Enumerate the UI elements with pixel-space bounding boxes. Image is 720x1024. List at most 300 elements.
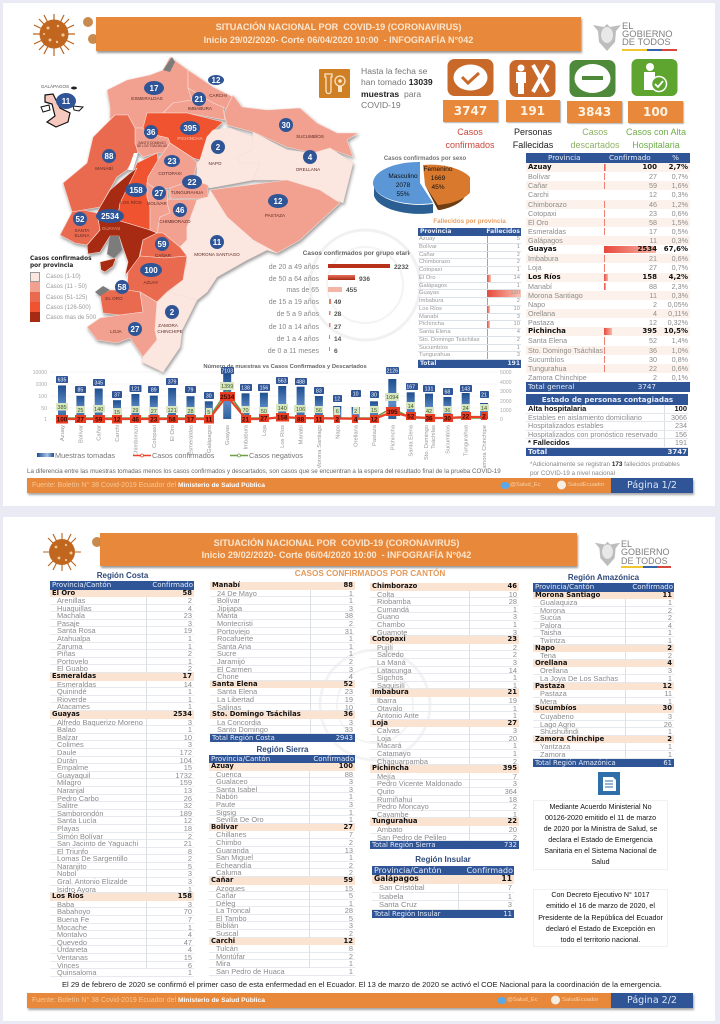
stat: casos descartados: 3843 bbox=[578, 105, 611, 119]
table: región amazónica: 1 bbox=[668, 636, 672, 645]
table: región sierra: Cuenca bbox=[216, 770, 241, 779]
table: región sierra continued: Loja bbox=[377, 734, 391, 743]
table: confirmed by province: 100 bbox=[642, 163, 657, 171]
table: state of infected people: 100 bbox=[674, 404, 687, 413]
table: región costa: Buena Fe bbox=[57, 915, 89, 924]
table: región costa: 6 bbox=[188, 961, 192, 970]
map labels and case count bubbles: LOS RÍOS bbox=[120, 199, 142, 205]
chart: samples vs confirmed and discarded cases bbox=[33, 364, 512, 468]
table: región sierra continued: La Maná bbox=[377, 658, 406, 667]
table: región insular: Total Región Insular bbox=[374, 910, 440, 918]
negative value labels: 25 bbox=[77, 408, 83, 414]
sample value labels: 379 bbox=[168, 380, 177, 386]
table: confirmed by province: 2 bbox=[653, 300, 657, 309]
table: confirmed by province: Sto. Domingo Tsáchilas bbox=[528, 346, 603, 354]
confirmed value labels: 88 bbox=[297, 416, 305, 424]
table: región costa: Pasaje bbox=[57, 619, 80, 628]
table: región sierra: Cañar bbox=[216, 891, 236, 900]
table: región costa: Confirmado bbox=[152, 581, 193, 589]
map labels and case count bubbles: SUCUMBÍOS bbox=[296, 133, 324, 139]
table: región amazónica: Tena bbox=[540, 651, 556, 660]
province axis labels: Loja bbox=[262, 424, 268, 436]
table: deaths by province: Bolívar bbox=[419, 244, 437, 250]
table: región sierra continued: Guano bbox=[377, 612, 399, 621]
table: confirmed by province: 1,0% bbox=[672, 346, 688, 354]
table: región amazónica: 30 bbox=[663, 704, 672, 712]
table: confirmed by province: Loja bbox=[528, 263, 542, 272]
heading: región amazónica: Región Amazónica bbox=[568, 573, 639, 582]
table: región costa: Quevedo bbox=[57, 938, 87, 947]
note: difference between samples and results: La diferencia entre las muestras tomadas menos los casos confirmados y descartados, son casos que se encuentran a la espera del resultado final de la prueba COVID-19 bbox=[27, 468, 501, 475]
table: región costa: Mocache bbox=[57, 923, 87, 932]
table: confirmed by province: Los Ríos bbox=[528, 272, 561, 280]
table: región costa: 2534 bbox=[173, 710, 192, 718]
table: región amazónica: 1 bbox=[668, 742, 672, 751]
table: región costa: 17 bbox=[183, 672, 192, 680]
table: región sierra: Suscal bbox=[216, 929, 238, 938]
bar chart: confirmed by age group: mas de 65 bbox=[286, 287, 319, 294]
table: confirmed by province: 2,3% bbox=[672, 282, 688, 291]
table: región costa: 172 bbox=[180, 748, 192, 757]
table: región sierra continued: Salcedo bbox=[377, 650, 404, 659]
table: confirmed by province: 0,05% bbox=[668, 300, 688, 309]
table: región costa continued: 23 bbox=[345, 687, 353, 696]
table: región amazónica: 1 bbox=[668, 628, 672, 637]
table: región sierra continued: Riobamba bbox=[377, 597, 411, 606]
bar chart: confirmed by age group: 27 bbox=[334, 324, 342, 331]
table: deaths by province: Cañar bbox=[419, 252, 435, 258]
table: región costa: Salitre bbox=[57, 801, 78, 810]
table: deaths by province: 3 bbox=[517, 352, 520, 358]
stat: alta hospitalaria: Casos con Alta bbox=[626, 127, 686, 137]
map labels and case count bubbles: TUNGURAHUA bbox=[171, 190, 204, 195]
confirmed value labels: 30 bbox=[444, 416, 451, 422]
pie chart: cases by sex: 55% bbox=[396, 191, 410, 198]
table: región costa: 1 bbox=[188, 968, 192, 977]
table: región costa: 1 bbox=[188, 695, 192, 704]
table: región costa: Provincia/Cantón bbox=[52, 581, 111, 589]
table: confirmed by province: 36 bbox=[649, 346, 657, 354]
table: región costa continued: Sto. Domingo Tsáchilas bbox=[212, 710, 301, 718]
logo: El Gobierno de Todos page 2 bbox=[595, 539, 671, 568]
province axis labels: Sucumbíos bbox=[445, 425, 451, 454]
negative value labels: 36 bbox=[444, 408, 450, 414]
table: confirmed by province: 11 bbox=[650, 236, 657, 245]
sample value labels: 488 bbox=[296, 380, 305, 386]
table: región sierra continued: 1 bbox=[513, 620, 517, 629]
table: región sierra continued: 395 bbox=[503, 764, 517, 772]
negative value labels: 140 bbox=[94, 407, 103, 413]
table: región costa continued: Chone bbox=[217, 672, 239, 681]
table: confirmed by province: 11 bbox=[650, 291, 657, 300]
heading: región insular: Región Insular bbox=[415, 855, 471, 864]
table: región sierra continued: Otavalo bbox=[377, 704, 402, 712]
sample value labels: 37 bbox=[114, 392, 120, 398]
footer: page number 2: Página 2/2 bbox=[627, 995, 677, 1006]
map labels and case count bubbles: 12 bbox=[212, 76, 221, 85]
text: samples taken: han tomado 13039 bbox=[361, 77, 433, 87]
stat: alta hospitalaria bbox=[626, 59, 686, 150]
table: región amazónica: 3 bbox=[668, 712, 672, 721]
table: región amazónica: Morona Santiago bbox=[535, 590, 600, 598]
footer: page 1 source: Fuente: Boletín N° 38 Covid-2019 Ecuador del Ministerio de Salud Pública bbox=[32, 482, 265, 489]
table: región costa continued: Salinas bbox=[217, 702, 241, 712]
table: región insular: Provincia/Cantón bbox=[374, 866, 442, 875]
sample bars bbox=[58, 374, 488, 419]
text: executive decree: Presidente de la República del Ecuador bbox=[538, 914, 663, 922]
sample value labels: 121 bbox=[131, 386, 140, 392]
table: state of infected people: Hospitalizados con pronóstico reservado bbox=[528, 430, 657, 439]
negative value labels: 29 bbox=[132, 408, 138, 414]
bar chart: confirmed by age group: 6 bbox=[334, 348, 338, 355]
table: región costa continued: 88 bbox=[344, 581, 353, 589]
watermark: page 1 coat of arms bbox=[308, 228, 422, 342]
table: región amazónica: 26 bbox=[664, 720, 672, 729]
table: confirmed by province: 1,4% bbox=[672, 336, 688, 345]
left axis bbox=[33, 370, 47, 423]
negative value labels: 140 bbox=[278, 406, 287, 412]
table: región sierra continued: 3 bbox=[513, 658, 517, 667]
map: Galápagos islands bbox=[41, 83, 83, 127]
map labels and case count bubbles: 21 bbox=[195, 95, 204, 104]
table: región costa: 1 bbox=[188, 634, 192, 643]
right axis: 5000 bbox=[500, 370, 512, 376]
map labels and case count bubbles: 59 bbox=[158, 240, 167, 249]
table: región costa: 3 bbox=[188, 869, 192, 878]
table: región costa: San Jacinto de Yaguachi bbox=[57, 839, 138, 848]
table: región costa: Portovelo bbox=[57, 657, 88, 666]
table: state of infected people: Alta hospitalaria bbox=[528, 404, 586, 413]
table: confirmed by province: 2 bbox=[653, 373, 657, 382]
icon: legal document bbox=[598, 772, 620, 795]
province axis labels: Los Ríos bbox=[280, 425, 286, 448]
table: región sierra: 15 bbox=[345, 884, 353, 892]
table: confirmed by province: Carchi bbox=[528, 190, 549, 199]
table: región sierra continued: 2 bbox=[513, 833, 517, 842]
table: región costa: 4 bbox=[188, 945, 192, 954]
negative value labels: 42 bbox=[426, 409, 432, 415]
table: deaths by province: Azuay bbox=[419, 236, 435, 242]
table: región costa: 58 bbox=[183, 588, 192, 596]
map labels and case count bubbles: 4 bbox=[308, 153, 313, 162]
table: región sierra continued: Chambo bbox=[377, 620, 405, 629]
text: samples taken bbox=[361, 66, 433, 110]
table: deaths by province: Sto. Domingo Tsáchilas bbox=[419, 337, 479, 343]
bar chart: confirmed by age group: de 5 a 9 años bbox=[277, 311, 319, 318]
table: región costa continued: Jaramijó bbox=[217, 657, 245, 666]
table: región costa: 159 bbox=[180, 778, 192, 787]
province axis labels: Esmeraldas bbox=[188, 425, 194, 456]
table: región sierra continued: 3 bbox=[513, 628, 517, 637]
table: región costa continued: 1 bbox=[349, 596, 353, 605]
map labels and case count bubbles: 2 bbox=[216, 143, 221, 152]
table: región costa: Vinces bbox=[57, 961, 79, 970]
table: state of infected people: Total bbox=[528, 448, 547, 456]
table: región sierra: Biblián bbox=[216, 921, 238, 930]
table: región sierra continued: 20 bbox=[509, 825, 517, 834]
table: región costa bbox=[50, 581, 194, 977]
table: deaths by province: 10 bbox=[514, 321, 520, 327]
negative value labels: 14 bbox=[481, 406, 487, 412]
negative value labels: 2 bbox=[354, 409, 357, 415]
table: región sierra continued: 732 bbox=[504, 841, 517, 849]
table: región amazónica: 1 bbox=[668, 674, 672, 683]
table: confirmed by province: Pastaza bbox=[528, 318, 554, 327]
table: región costa continued: La Concordia bbox=[217, 718, 261, 727]
table: confirmed by province: Tungurahua bbox=[528, 364, 566, 373]
table: confirmed by province: Cañar bbox=[528, 181, 548, 190]
negative value labels: 15 bbox=[371, 408, 377, 414]
table: región costa continued: La Libertad bbox=[217, 695, 254, 704]
table: deaths by province: Sucumbíos bbox=[419, 344, 448, 350]
table: deaths by province: 2 bbox=[517, 259, 520, 265]
table: deaths by province: 5 bbox=[517, 236, 520, 242]
table: región sierra: 3 bbox=[349, 785, 353, 794]
table: región costa: Quinsaloma bbox=[57, 968, 96, 977]
table: región sierra: Nabón bbox=[216, 792, 238, 801]
table: deaths by province: Chimborazo bbox=[419, 259, 450, 265]
table: región costa: 104 bbox=[180, 756, 192, 765]
table: región sierra continued: 1 bbox=[513, 741, 517, 750]
map: Ecuador provinces with confirmed cases bbox=[40, 56, 360, 376]
table: región costa: Arenillas bbox=[57, 596, 85, 605]
table: región costa: 2 bbox=[188, 832, 192, 840]
table: confirmed by province: Bolívar bbox=[528, 172, 550, 181]
map labels and case count bubbles: GUAYAS bbox=[102, 226, 120, 231]
negative value labels: 24 bbox=[463, 406, 469, 412]
confirmed value labels: 27 bbox=[77, 416, 84, 424]
table: confirmed by province: 0,3% bbox=[672, 190, 688, 199]
table: región sierra continued: 14 bbox=[509, 666, 517, 675]
table: deaths by province: 130 bbox=[510, 290, 520, 296]
table: confirmed by province: Manabí bbox=[528, 282, 552, 291]
stat: casos descartados bbox=[567, 60, 624, 150]
province axis labels: Guayas bbox=[225, 425, 231, 445]
table: región costa: Pedro Carbo bbox=[57, 794, 99, 803]
map labels and case count bubbles: DE LOS TSÁCHILAS bbox=[137, 144, 167, 148]
table: región costa: 14 bbox=[184, 680, 192, 689]
bar chart: confirmed by age group: de 50 a 64 años bbox=[269, 276, 319, 283]
table: state of infected people: 156 bbox=[675, 430, 687, 439]
confirmed value labels: 27 bbox=[260, 416, 268, 422]
logo: El Gobierno de Todos page 2: DE TODOS bbox=[621, 556, 668, 566]
table: confirmed by province: 0,8% bbox=[672, 355, 688, 364]
table: deaths by province: 2 bbox=[517, 337, 520, 343]
table: región costa: Guayas bbox=[52, 710, 80, 718]
table: región costa: 1 bbox=[188, 725, 192, 734]
table: región sierra: 27 bbox=[344, 823, 353, 831]
text: ministerial agreement: de 2020 por la Ministra de Salud, se bbox=[544, 825, 657, 833]
table: región costa continued: Bolívar bbox=[217, 596, 240, 605]
stat: personas fallecidas: 191 bbox=[520, 104, 545, 118]
legend: cases by province: Casos mas de 500 bbox=[46, 315, 96, 321]
table: región sierra continued: Pujilí bbox=[377, 643, 393, 652]
negative value labels: 5 bbox=[207, 410, 210, 416]
sample value labels: 68 bbox=[445, 390, 450, 396]
province axis labels: Carchi bbox=[115, 425, 121, 442]
table: región costa: Balzar bbox=[57, 733, 78, 742]
table: región insular: Confirmado bbox=[467, 866, 513, 875]
table: región costa continued: 1 bbox=[349, 642, 353, 651]
table: región sierra: Guaranda bbox=[216, 846, 249, 855]
table: confirmed by province: 1,2% bbox=[672, 200, 688, 208]
text: ministerial agreement: declara el Estado de Emergencia bbox=[548, 836, 653, 844]
sample value labels: 12 bbox=[334, 396, 340, 402]
table: región costa continued: 24 De Mayo bbox=[217, 589, 257, 598]
table: región sierra: Chillanes bbox=[216, 830, 246, 839]
watermark: page 2 coat of arms bbox=[318, 648, 432, 762]
table: región sierra: 1 bbox=[349, 959, 353, 968]
stat: personas fallecidas bbox=[506, 60, 562, 150]
table: región costa: 1 bbox=[188, 885, 192, 894]
text: executive decree: Con Decreto Ejecutivo N° 1017 bbox=[551, 891, 650, 899]
table: región costa: Rioverde bbox=[57, 695, 87, 704]
table: confirmed by province: Provincia bbox=[548, 153, 581, 162]
table: región sierra continued: Cotopaxi bbox=[372, 635, 406, 643]
table: confirmed by province: 27 bbox=[649, 172, 657, 181]
table: región amazónica: 12 bbox=[663, 682, 672, 690]
chart legend bbox=[37, 451, 303, 460]
text: executive decree: declaró el Estado de Excepción en bbox=[546, 925, 655, 933]
table: región sierra: 1 bbox=[349, 899, 353, 908]
table: región sierra: 8 bbox=[349, 944, 353, 953]
table: región amazónica: Morona bbox=[540, 606, 565, 615]
bar chart: confirmed by age group: 28 bbox=[334, 311, 342, 318]
table: confirmed by province: 4,2% bbox=[669, 272, 688, 280]
table: región costa: El Guabo bbox=[57, 664, 88, 673]
province axis labels: Azuay bbox=[60, 425, 66, 441]
map labels and case count bubbles: 88 bbox=[105, 152, 114, 161]
table: región costa: 3 bbox=[188, 900, 192, 909]
province axis labels: Manabí bbox=[299, 425, 305, 444]
confirmed value labels: 17 bbox=[187, 416, 194, 424]
negative value labels bbox=[56, 382, 489, 416]
table: confirmed by province: 52 bbox=[649, 336, 657, 345]
map labels and case count bubbles: CARCHI bbox=[209, 93, 227, 98]
note: probable deaths: *Adicionalmente se registran 173 fallecidos probables bbox=[530, 461, 680, 468]
province axis labels: Tsáchilas bbox=[431, 425, 437, 449]
table: confirmed by province: 1,6% bbox=[672, 181, 688, 190]
table: región amazónica: La Joya De Los Sachas bbox=[540, 674, 618, 683]
sample value labels: 131 bbox=[425, 386, 433, 392]
header: page 2 title bbox=[100, 533, 577, 566]
confirmed value labels: 11 bbox=[316, 416, 323, 424]
table: confirmed by province: Guayas bbox=[528, 245, 557, 253]
table: región sierra: Chimbo bbox=[216, 838, 241, 847]
header: page 1 title: SITUACIÓN NACIONAL POR COVID-19 (CORONAVIRUS) bbox=[216, 22, 461, 32]
table: región sierra: 1 bbox=[349, 808, 353, 817]
logo: El Gobierno de Todos page 1: DE TODOS bbox=[622, 36, 671, 47]
table: región sierra: 1 bbox=[349, 792, 353, 801]
table: región sierra: Echeandía bbox=[216, 861, 251, 870]
table: región costa continued: 10 bbox=[345, 702, 353, 712]
table: región costa: 15 bbox=[184, 763, 192, 772]
right axis: 2000 bbox=[500, 399, 512, 405]
table: deaths by province: Galápagos bbox=[419, 282, 447, 288]
table: región costa continued: 33 bbox=[345, 725, 353, 734]
table: región costa continued: Santa Elena bbox=[212, 680, 258, 688]
table: región amazónica: Confirmado bbox=[632, 583, 673, 591]
table: región sierra continued: 1 bbox=[513, 749, 517, 758]
table: región sierra continued: 23 bbox=[508, 635, 517, 643]
table: región costa: Zaruma bbox=[57, 642, 82, 651]
table: región costa: 1732 bbox=[176, 771, 192, 780]
table: región amazónica: Orellana bbox=[540, 666, 568, 675]
heading: región costa: Región Costa bbox=[97, 571, 148, 580]
table: región costa: El Triunfo bbox=[57, 847, 88, 856]
table: región sierra continued: Catamayo bbox=[377, 749, 411, 758]
header: page 2 title: Inicio 29/02/2020- Corte 06/04/2020 10:00 - INFOGRAFÍA N°042 bbox=[202, 550, 471, 560]
table: región costa: Samborondón bbox=[57, 809, 103, 818]
negative value labels: 14 bbox=[408, 404, 414, 410]
pie chart: cases by sex: 1669 bbox=[431, 175, 446, 182]
legend: cases by province: Casos (1-10) bbox=[46, 274, 81, 280]
stat: casos descartados: Casos bbox=[582, 127, 608, 137]
table: región costa: Machala bbox=[57, 611, 85, 620]
table: región sierra: Tulcán bbox=[216, 944, 238, 953]
table: confirmed by province: Napo bbox=[528, 300, 545, 309]
table: región amazónica: Napo bbox=[535, 644, 555, 652]
table: región costa: 26 bbox=[184, 794, 192, 803]
province axis labels: Chimborazo bbox=[133, 425, 139, 456]
note: probable deaths: por COVID-19 a nivel nacional bbox=[530, 470, 615, 477]
table: confirmed by province: 2,7% bbox=[669, 163, 688, 171]
table: región costa continued: 2 bbox=[349, 657, 353, 666]
table: state of infected people: 3747 bbox=[668, 448, 687, 456]
sample value labels: 138 bbox=[241, 386, 250, 392]
table: región costa: Empalme bbox=[57, 763, 88, 772]
confirmed value labels: 4 bbox=[354, 416, 358, 424]
table: región sierra: Confirmado bbox=[313, 754, 354, 762]
legend: cases by province: Casos confirmados bbox=[30, 256, 92, 262]
table: región insular: 3 bbox=[508, 900, 512, 909]
table: región costa continued: Santa Ana bbox=[217, 642, 251, 651]
map labels and case count bubbles: 395 bbox=[183, 124, 197, 133]
table: región costa continued: Jipijapa bbox=[217, 604, 242, 613]
heading: región sierra: Región Sierra bbox=[256, 745, 308, 754]
table: región sierra: 3 bbox=[349, 800, 353, 809]
table: región insular bbox=[372, 866, 514, 918]
map labels and case count bubbles: MORONA SANTIAGO bbox=[194, 252, 240, 257]
province axis labels: El Oro bbox=[170, 425, 176, 441]
negative value labels: 121 bbox=[168, 408, 177, 414]
bar chart: confirmed by age group: Casos confirmados por grupo etario bbox=[303, 250, 410, 257]
table: confirmed by province: 0,32% bbox=[668, 318, 688, 327]
text: ministerial agreement: 00126-2020 emitido el 11 de marzo bbox=[545, 814, 656, 822]
header: page 2 title: SITUACIÓN NACIONAL POR COVID-19 (CORONAVIRUS) bbox=[214, 538, 459, 548]
table: región sierra continued: Ambato bbox=[377, 825, 402, 834]
table: región costa: Naranjito bbox=[57, 862, 87, 871]
logo: El Gobierno de Todos page 1: GOBIERNO bbox=[622, 28, 673, 39]
panel: page 2 card bbox=[3, 517, 715, 1021]
table: confirmed by province bbox=[526, 153, 690, 392]
table: state of infected people: * Fallecidos bbox=[528, 438, 570, 447]
left axis: 1 bbox=[44, 417, 47, 423]
table: deaths by province: 1 bbox=[517, 267, 520, 273]
confirmed value labels: 2 bbox=[482, 414, 486, 420]
table: región insular: 1 bbox=[508, 892, 512, 900]
table: state of infected people: 191 bbox=[675, 438, 687, 447]
table: confirmed by province: 0,3% bbox=[672, 236, 688, 245]
table: confirmed by province: 12 bbox=[649, 190, 657, 199]
text: ministerial agreement bbox=[533, 800, 668, 870]
table: región costa: Baba bbox=[57, 900, 74, 909]
table: región costa continued bbox=[210, 582, 355, 742]
table: región sierra continued: Imbabura bbox=[372, 688, 409, 696]
table: región costa: Santa Rosa bbox=[57, 626, 96, 635]
table: confirmed by province: 23 bbox=[649, 209, 657, 218]
sample value labels: 85 bbox=[78, 388, 83, 394]
